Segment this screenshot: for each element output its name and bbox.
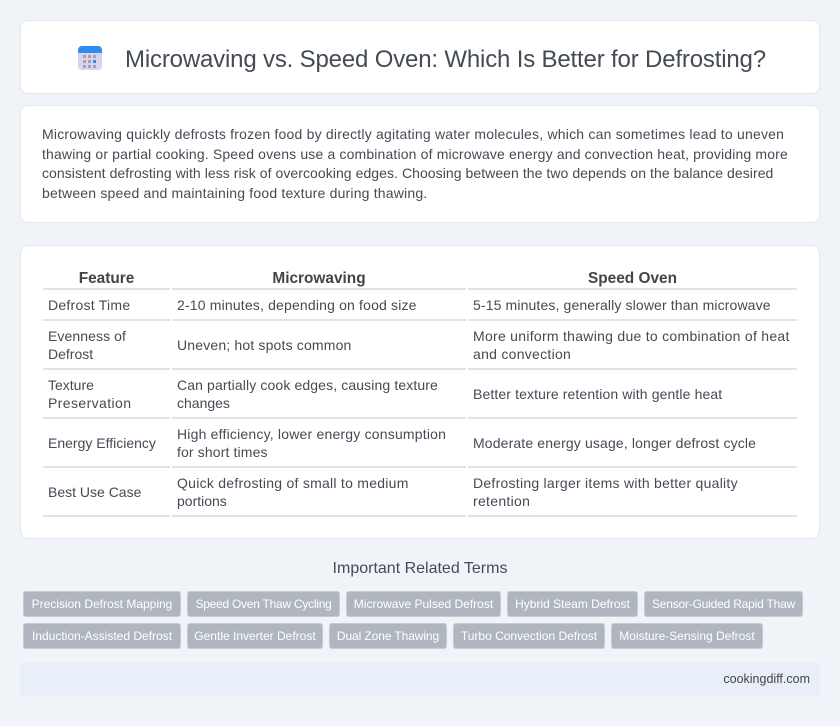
intro text: Microwaving quickly defrosts frozen food by directly agitating water molecules, which can sometimes lead to uneven xyxy=(42,126,784,142)
heading: important related terms: Important Related Terms xyxy=(333,560,507,577)
footer source link: cookingdiff.com xyxy=(723,672,810,686)
row: best use case: Best Use Case xyxy=(48,484,141,500)
title: Microwaving vs. Speed Oven: Which Is Better for Defrosting? xyxy=(125,46,766,73)
panel: comparison table: Better texture retention with gentle heat xyxy=(473,386,722,402)
tags: related terms: Turbo Convection Defrost xyxy=(461,629,597,643)
panel: comparison table: More uniform thawing due to combination of heat xyxy=(473,328,790,344)
row: defrost time: Defrost Time xyxy=(48,297,130,313)
panel: comparison table: changes xyxy=(177,395,230,411)
row: evenness of defrost xyxy=(48,328,126,362)
panel: header xyxy=(20,20,820,94)
footer xyxy=(20,662,820,696)
panel: comparison table xyxy=(20,245,820,539)
icon: calendar xyxy=(78,46,102,70)
panel: comparison table: 5-15 minutes, generally slower than microwave xyxy=(473,297,771,313)
panel: comparison table: and convection xyxy=(473,346,571,362)
tags: related terms: Speed Oven Thaw Cycling xyxy=(195,597,332,611)
panel: comparison table: Microwaving xyxy=(272,270,366,287)
row: texture preservation xyxy=(48,377,131,411)
panel: comparison table: High efficiency, lower energy consumption xyxy=(177,426,446,442)
intro text: consistent defrosting with less risk of overcooking edges. Choosing between the two depends on the balance desired xyxy=(42,165,773,181)
panel: comparison table: Speed Oven xyxy=(588,270,677,287)
panel: comparison table: Moderate energy usage, longer defrost cycle xyxy=(473,435,756,451)
intro text: thawing or partial cooking. Speed ovens use a combination of microwave energy and convection heat, providing more xyxy=(42,146,788,162)
tags: related terms: Induction-Assisted Defrost xyxy=(32,629,172,643)
panel: comparison table: for short times xyxy=(177,444,268,460)
tags: related terms: Precision Defrost Mapping xyxy=(32,597,172,611)
row: evenness of defrost: Defrost xyxy=(48,346,93,362)
panel: comparison table: Can partially cook edges, causing texture xyxy=(177,377,438,393)
row: energy efficiency: Energy Efficiency xyxy=(48,435,156,451)
panel: comparison table: Quick defrosting of small to medium xyxy=(177,475,409,491)
tags: related terms: Dual Zone Thawing xyxy=(337,629,439,643)
tags: related terms: Hybrid Steam Defrost xyxy=(515,597,630,611)
intro text xyxy=(42,126,788,201)
tags: related terms: Microwave Pulsed Defrost xyxy=(354,597,493,611)
panel: comparison table: Uneven; hot spots common xyxy=(177,337,352,353)
tags: related terms: Gentle Inverter Defrost xyxy=(194,629,316,643)
table header: Feature xyxy=(79,270,134,287)
panel: comparison table: 2-10 minutes, depending on food size xyxy=(177,297,417,313)
row: texture preservation: Texture xyxy=(48,377,94,393)
intro text: between speed and maintaining food texture during thawing. xyxy=(42,185,427,201)
tags: related terms: Moisture-Sensing Defrost xyxy=(619,629,755,643)
tags: related terms: Sensor-Guided Rapid Thaw xyxy=(652,597,795,611)
panel: comparison table: portions xyxy=(177,493,227,509)
panel: comparison table: retention xyxy=(473,493,530,509)
panel: introduction xyxy=(20,105,820,223)
tags: related terms xyxy=(23,591,803,649)
row: texture preservation: Preservation xyxy=(48,395,131,411)
panel: comparison table: Defrosting larger items with better quality xyxy=(473,475,738,491)
row: evenness of defrost: Evenness of xyxy=(48,328,126,344)
